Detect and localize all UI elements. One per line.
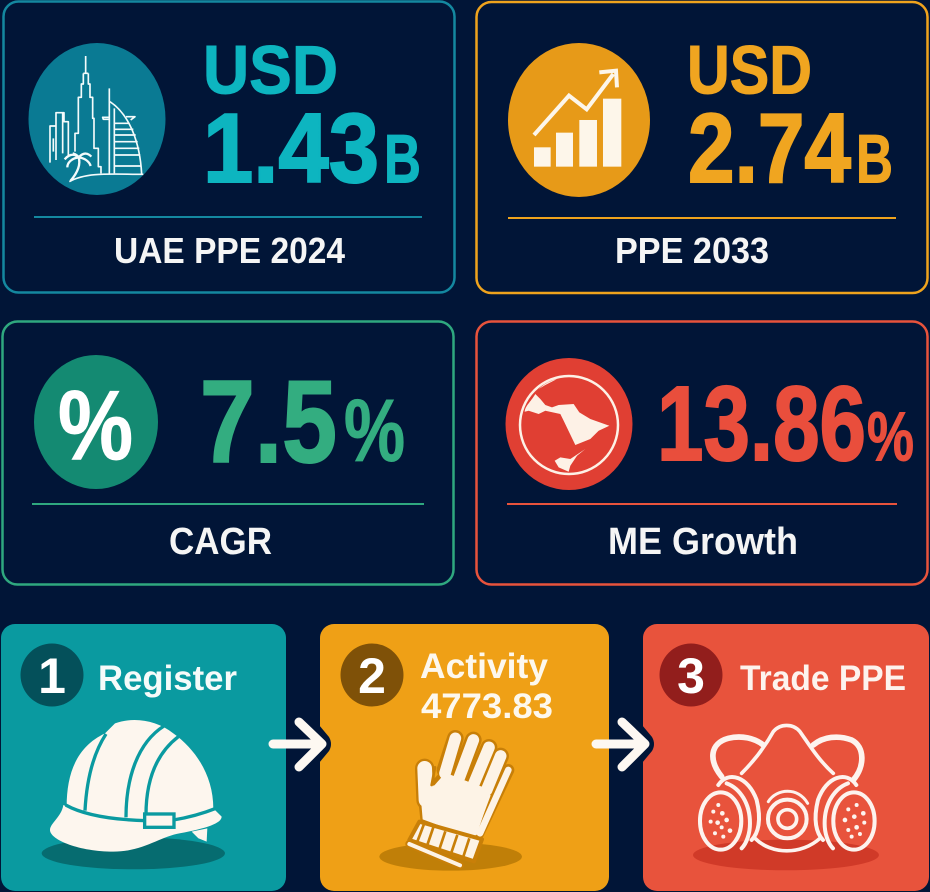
panel: UAE PPE 2024: [4, 2, 454, 292]
icon: Dubai skyline: [28, 43, 166, 195]
panel: CAGR: [2, 322, 454, 584]
icon: respirator mask: [693, 725, 879, 870]
unit: B: B: [856, 120, 893, 198]
value: 7.5: 7.5: [200, 356, 337, 487]
icon: Middle East globe: [506, 358, 632, 490]
icon: growth chart: [508, 43, 650, 197]
step 3: Trade PPE: [643, 624, 929, 891]
unit: percent: %: [344, 381, 405, 480]
heading: Trade PPE: Trade PPE: [740, 659, 906, 698]
step 1: Register: [1, 624, 286, 891]
unit: percent: %: [867, 398, 914, 476]
label: PPE 2033: PPE 2033: [615, 230, 769, 271]
badge: 3: 3: [677, 648, 705, 704]
step 2: Activity 4773.83: [320, 624, 609, 891]
value: 2.74: 2.74: [688, 93, 851, 203]
arrow: step 2 to step 3: [596, 722, 654, 767]
icon: percent badge: [34, 355, 158, 489]
heading: Register: Register: [98, 659, 237, 698]
value: 13.86: 13.86: [657, 365, 866, 483]
badge: 2: [340, 644, 404, 706]
badge: 2: 2: [358, 648, 386, 704]
badge: 1: [20, 644, 84, 706]
value: USD: USD: [203, 32, 338, 108]
label: UAE PPE 2024: UAE PPE 2024: [114, 230, 345, 271]
label: ME Growth: ME Growth: [608, 521, 798, 563]
icon: hard hat: [42, 720, 225, 869]
badge: 1: 1: [38, 648, 66, 704]
value: USD: USD: [687, 32, 812, 108]
icon: percent badge: %: [58, 370, 133, 480]
label: CAGR: CAGR: [169, 521, 272, 563]
badge: 3: [660, 644, 722, 706]
panel: ME Growth: [476, 322, 928, 584]
value: 1.43: 1.43: [203, 93, 379, 203]
panel: PPE 2033: [476, 2, 928, 293]
icon: glove: [379, 738, 522, 871]
heading: Activity: Activity: [420, 647, 549, 686]
heading: 4773.83: 4773.83: [421, 687, 553, 726]
arrow: step 1 to step 2: [273, 722, 331, 767]
unit: B: B: [384, 120, 421, 198]
